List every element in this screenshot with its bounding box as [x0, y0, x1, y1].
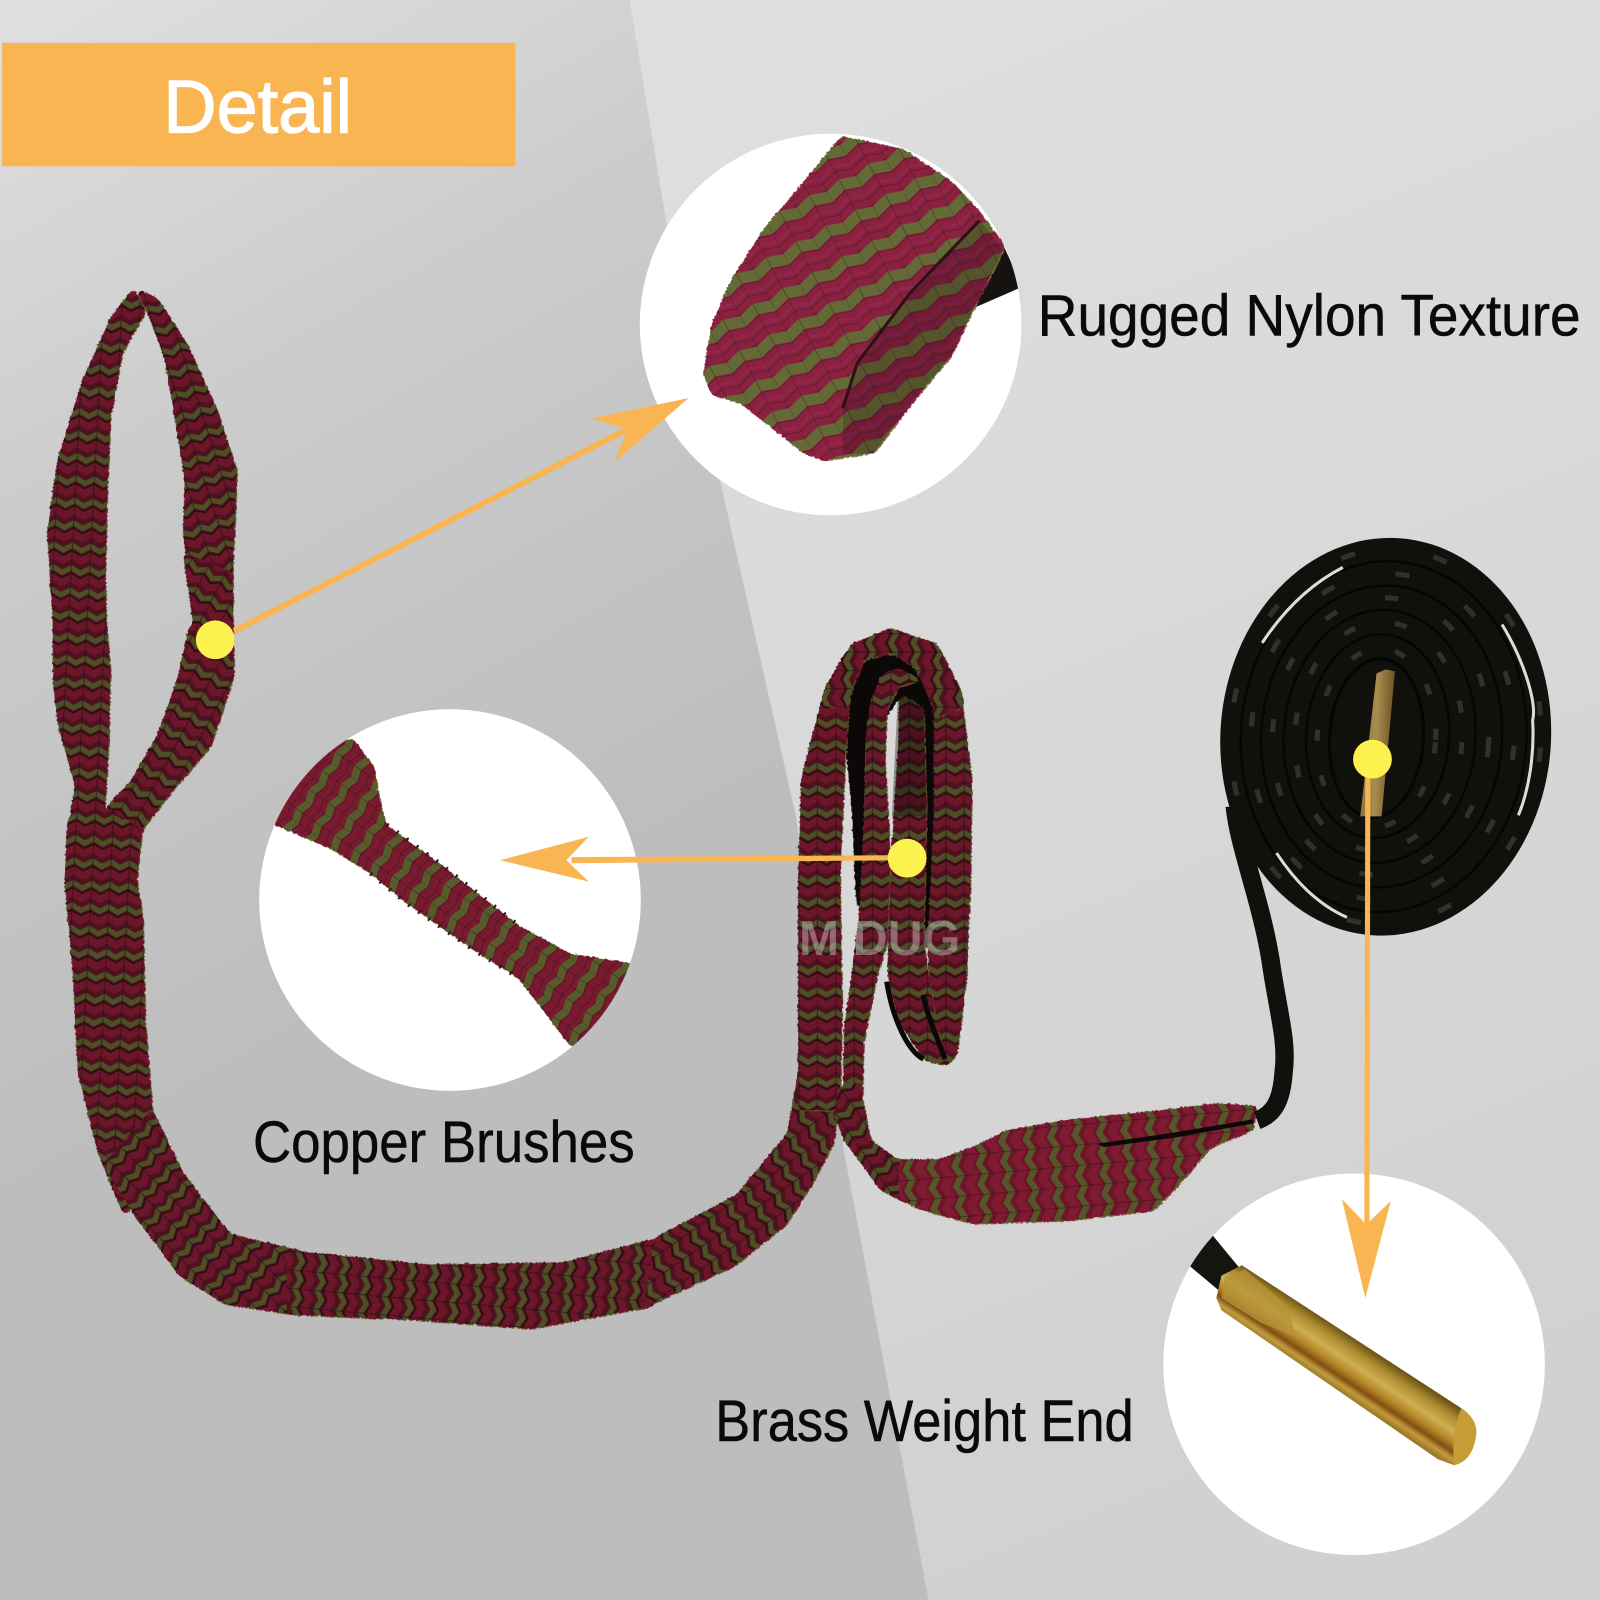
rope: trunk corner	[102, 1107, 306, 1316]
rope: inner left strand	[842, 666, 923, 1110]
rope close-up	[274, 739, 630, 1046]
arrow: to brass weight	[1342, 759, 1391, 1298]
rope: lower strand curve	[834, 1082, 923, 1211]
black cord	[1235, 806, 1285, 1120]
marker dots	[196, 620, 1392, 878]
coil gaps	[1262, 567, 1533, 917]
label: nylon texture: Rugged Nylon Texture	[1038, 284, 1581, 349]
watermark: M DUG	[799, 912, 960, 966]
rope: lower strand flat	[898, 1102, 1257, 1223]
rope: centre arc	[819, 627, 964, 719]
arrow: to copper brushes	[500, 837, 907, 882]
rope: loop right strand lower	[97, 551, 234, 880]
rope: trunk vertical	[63, 806, 184, 1214]
rope: loop left strand	[46, 286, 146, 837]
panel: brass weight	[1163, 1173, 1545, 1555]
panel: nylon texture	[640, 134, 1022, 515]
rope: centre right band	[923, 643, 971, 1065]
brass close-up	[1189, 1234, 1476, 1465]
rope: central strand	[887, 692, 947, 1065]
black coil	[1207, 527, 1564, 947]
rope: centre left band	[797, 643, 863, 1110]
label: copper brushes: Copper Brushes	[253, 1110, 635, 1175]
rope close-up	[702, 135, 1022, 460]
arrow: to nylon texture	[233, 398, 689, 634]
rope: centre rising section	[643, 1071, 840, 1308]
title banner: Detail	[163, 66, 352, 150]
panel: copper brushes	[255, 709, 653, 1091]
label: brass weight: Brass Weight End	[715, 1389, 1134, 1454]
rope: bottom fold black edges	[887, 982, 945, 1059]
bore snake rope	[46, 286, 1564, 1329]
rope: loop right strand upper	[133, 286, 237, 638]
rope: trunk bottom	[286, 1235, 663, 1329]
rope: slit in lower strand	[1097, 1119, 1253, 1147]
rope: centre black fold	[846, 643, 935, 949]
title banner	[2, 43, 515, 166]
brass weight in coil	[1360, 669, 1395, 816]
rope: central strand shadow	[892, 694, 927, 816]
